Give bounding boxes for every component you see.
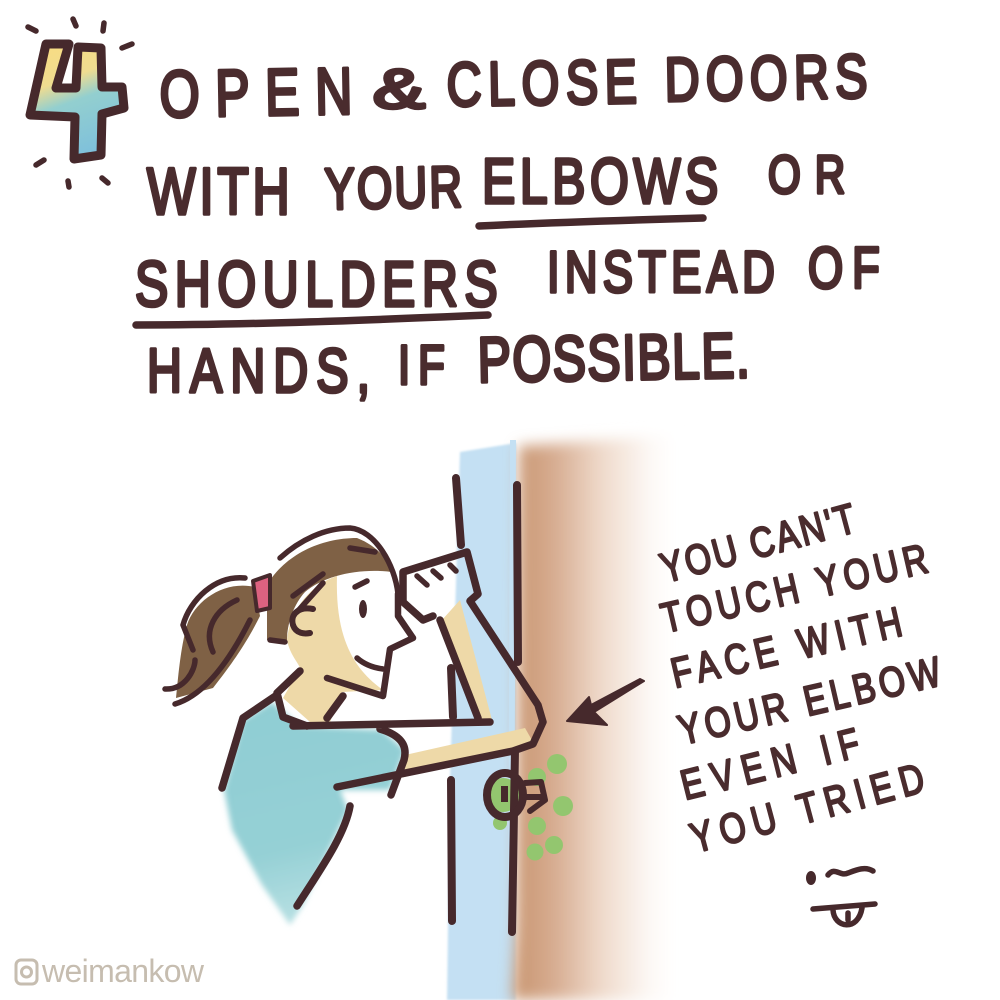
title line 3: SHOULDERS bbox=[135, 249, 498, 320]
ponytail bbox=[176, 586, 260, 698]
side note text: YOU CAN'T bbox=[656, 496, 861, 593]
side note text: YOUR ELBOW bbox=[674, 649, 945, 755]
watermark: weimankow bbox=[41, 953, 205, 989]
skin: neck and face bbox=[283, 576, 383, 722]
door knob bbox=[487, 773, 545, 817]
eye and brow bbox=[355, 581, 367, 618]
side note text: YOU TRIED bbox=[686, 756, 929, 863]
title line 3: INSTEAD bbox=[547, 241, 775, 305]
side note text: EVEN IF bbox=[676, 721, 864, 810]
title line 4: POSSIBLE. bbox=[477, 320, 750, 396]
door lines bbox=[451, 478, 518, 932]
side note text: FACE WITH bbox=[667, 600, 906, 698]
title line 4 bbox=[147, 320, 750, 405]
arm and fist bbox=[293, 552, 543, 795]
title bbox=[135, 42, 880, 405]
title line 1: DOORS bbox=[664, 42, 868, 114]
title line 1: & bbox=[373, 57, 425, 120]
mouth bbox=[357, 658, 383, 669]
title line 3 bbox=[135, 237, 880, 320]
title line 2: WITH bbox=[147, 154, 290, 228]
side note text bbox=[656, 496, 945, 863]
icon: tongue-out face bbox=[806, 869, 875, 925]
title line 3: OF bbox=[808, 237, 880, 301]
face outline bbox=[327, 594, 413, 696]
skin: forearm and upper arm bbox=[400, 600, 533, 778]
title line 2 bbox=[147, 145, 845, 228]
side note text: TOUCH YOUR bbox=[657, 536, 932, 643]
title line 4: IF bbox=[398, 334, 445, 396]
outlines: hair and ponytail bbox=[165, 528, 398, 704]
title line 2: ELBOWS bbox=[482, 146, 718, 217]
shirt bbox=[224, 702, 405, 925]
title line 1: OPEN bbox=[159, 53, 353, 131]
arrow bbox=[567, 679, 644, 725]
illustration: door and wall bbox=[447, 435, 675, 1000]
illustration: girl bbox=[165, 528, 545, 925]
wall: brown bbox=[512, 435, 675, 1000]
underline: elbows bbox=[479, 218, 703, 226]
title line 2: YOUR bbox=[324, 155, 462, 222]
shirt outlines bbox=[222, 671, 350, 906]
title line 1: CLOSE bbox=[446, 47, 638, 119]
title line 1 bbox=[159, 42, 868, 131]
scrunchie bbox=[253, 575, 270, 611]
door frame: blue bbox=[447, 443, 516, 1000]
germs: green dots bbox=[486, 754, 573, 860]
icon: number 4 badge bbox=[28, 19, 132, 187]
title line 4: HANDS, bbox=[147, 336, 370, 405]
title line 2: OR bbox=[768, 145, 845, 205]
underline: shoulders bbox=[136, 315, 488, 325]
icon: instagram bbox=[16, 960, 37, 984]
ear bbox=[292, 608, 313, 633]
hair bbox=[267, 538, 392, 640]
